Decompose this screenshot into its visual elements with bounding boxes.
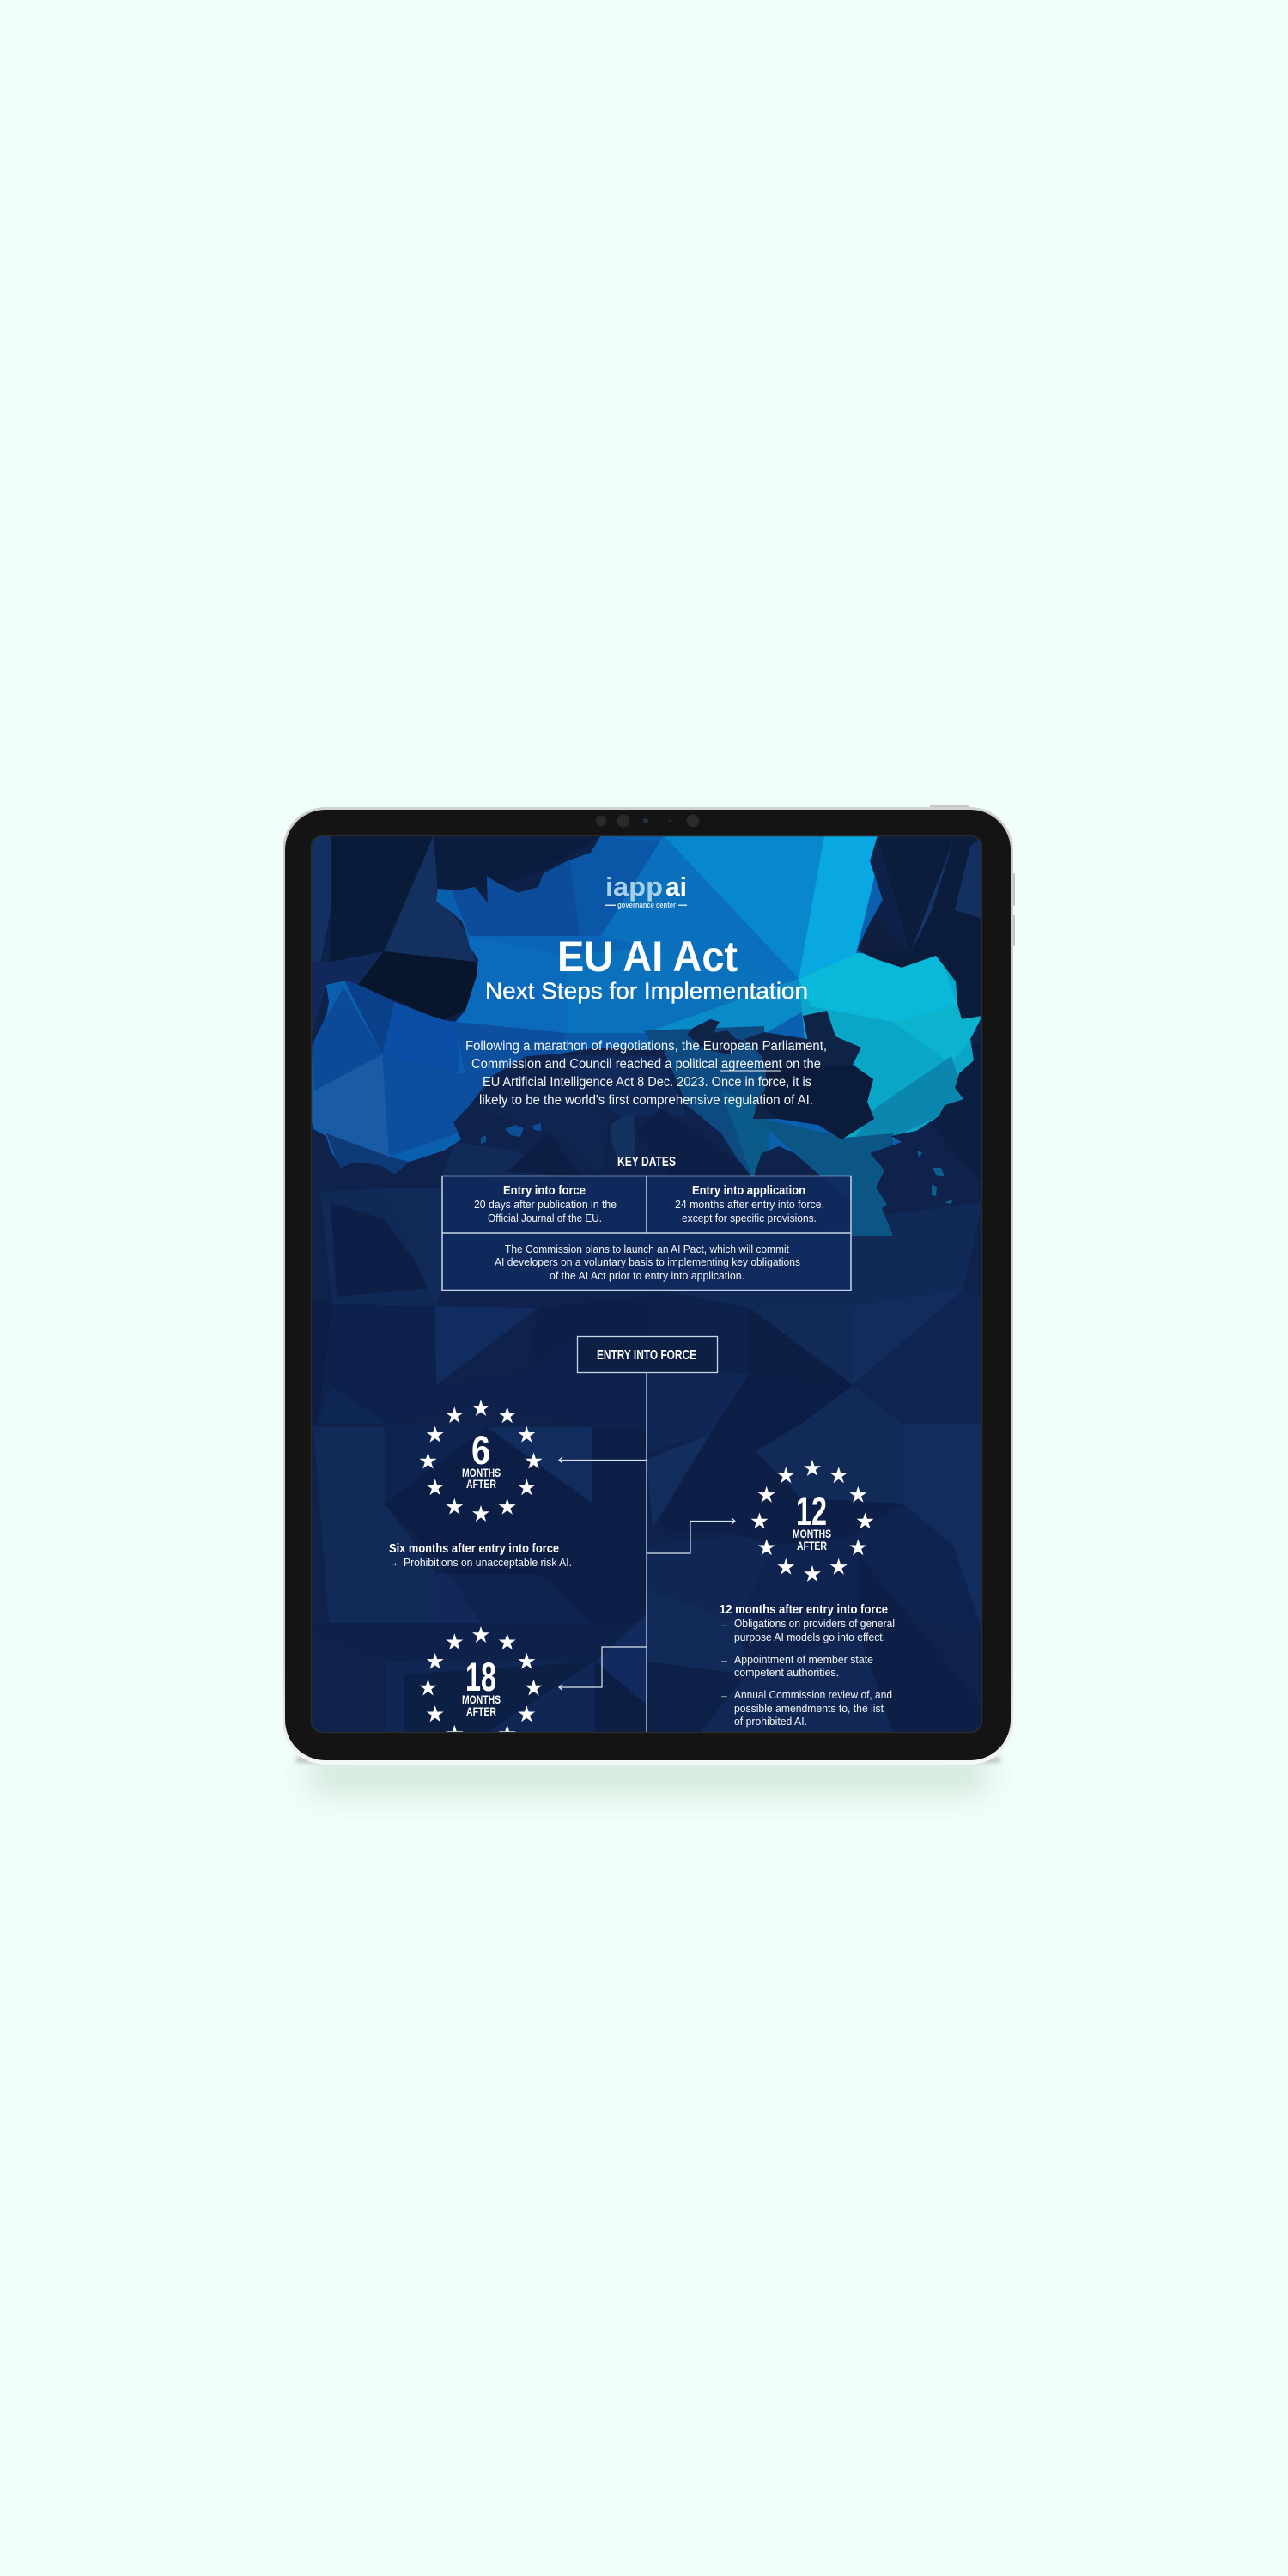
text: six months: Six months after entry into force (389, 1541, 559, 1556)
arrow: 12 months (647, 1518, 735, 1553)
entry into force cell: Official Journal of the EU. (488, 1212, 602, 1224)
screen edge (311, 836, 982, 1733)
arrow: 18 months (559, 1647, 647, 1690)
tablet device frame (283, 805, 1015, 1765)
screen (311, 835, 982, 1748)
milestone: 12 months: 12 (796, 1488, 827, 1534)
text: 12 months: purpose AI models go into effect. (734, 1631, 885, 1643)
Aegean islands (917, 1151, 953, 1204)
milestone: 18 months: MONTHS (462, 1692, 501, 1706)
metal rim (283, 807, 1013, 1765)
entry into application cell: 24 months after entry into force, (675, 1198, 824, 1211)
title: EU AI Act (557, 933, 738, 981)
logo: iapp ai governance center: iapp (605, 872, 663, 902)
intro paragraph: likely to be the world's first comprehensive regulation of AI. (479, 1093, 813, 1108)
text: 12 months: → (720, 1617, 729, 1630)
text: 12 months: competent authorities. (734, 1666, 839, 1679)
logo: iapp ai governance center (605, 877, 687, 909)
AI Pact cell (495, 1242, 800, 1282)
text: 12 months: Obligations on providers of general (734, 1617, 895, 1630)
entry into application cell: Entry into application (692, 1183, 805, 1198)
text: 12 months: of prohibited AI. (734, 1715, 807, 1728)
entry into force cell (474, 1185, 617, 1222)
entry into force cell: Entry into force (503, 1183, 586, 1198)
milestone: 18 months: AFTER (466, 1704, 496, 1718)
Europe map in blue facets (311, 835, 982, 1241)
side buttons (930, 805, 1015, 946)
entry into application cell (675, 1183, 824, 1224)
milestone: 6 months: AFTER (466, 1477, 496, 1491)
logo: iapp ai governance center: ai (665, 872, 687, 902)
text: 12 months: → (720, 1653, 729, 1666)
AI Pact cell: of the AI Act prior to entry into application. (550, 1269, 744, 1282)
entry into force box (577, 1336, 718, 1372)
text: 12 months: possible amendments to, the list (734, 1702, 884, 1715)
text: 12 months: 12 months after entry into force (720, 1602, 888, 1617)
Corsica and Sardinia (611, 1115, 635, 1161)
text: six months: → (389, 1556, 398, 1569)
logo: iapp ai governance center: governance center (617, 901, 676, 910)
key dates heading: KEY DATES (617, 1155, 676, 1170)
arrow: 6 months (559, 1457, 647, 1463)
black bezel (285, 810, 1011, 1760)
text: 12 months: Annual Commission review of, and (734, 1688, 892, 1701)
front cameras (596, 814, 699, 828)
milestone: 6 months: 6 (471, 1427, 490, 1473)
text: six months: Prohibitions on unacceptable risk AI. (404, 1556, 572, 1569)
subtitle: Next Steps for Implementation (485, 978, 808, 1004)
text: six months (389, 1541, 572, 1569)
text: 12 months: Appointment of member state (734, 1653, 873, 1666)
low-poly navy background (311, 835, 982, 1735)
intro paragraph: Following a marathon of negotiations, the European Parliament, (465, 1039, 827, 1054)
text: 12 months: → (720, 1688, 729, 1701)
Italy northern coast (687, 1019, 744, 1054)
timeline spine (646, 1372, 647, 1733)
text: 12 months (720, 1602, 895, 1728)
intro paragraph: EU Artificial Intelligence Act 8 Dec. 2023. Once in force, it is (483, 1075, 811, 1090)
milestone: 12 months (750, 1460, 874, 1582)
Balkans coastline (744, 1011, 874, 1139)
milestone: 6 months: MONTHS (462, 1466, 501, 1479)
intro paragraph (465, 1039, 827, 1108)
milestone: 12 months: MONTHS (793, 1527, 831, 1540)
intro paragraph: Commission and Council reached a political agreement on the (471, 1057, 821, 1072)
milestone: 18 months (419, 1626, 543, 1732)
entry into force cell: 20 days after publication in the (474, 1198, 617, 1211)
entry into force box: ENTRY INTO FORCE (597, 1348, 696, 1363)
entry into application cell: except for specific provisions. (682, 1212, 817, 1224)
AI Pact cell: AI developers on a voluntary basis to implementing key obligations (495, 1255, 800, 1268)
milestone: 18 months: 18 (465, 1654, 496, 1699)
milestone: 6 months (419, 1400, 543, 1522)
Balearic islands (481, 1123, 541, 1144)
Balkans shaded facet (764, 1065, 874, 1139)
device shadow (296, 1756, 1000, 1795)
AI Pact cell: The Commission plans to launch an AI Pact, which will commit (505, 1242, 789, 1255)
key dates table (442, 1176, 851, 1290)
milestone: 12 months: AFTER (797, 1539, 827, 1552)
